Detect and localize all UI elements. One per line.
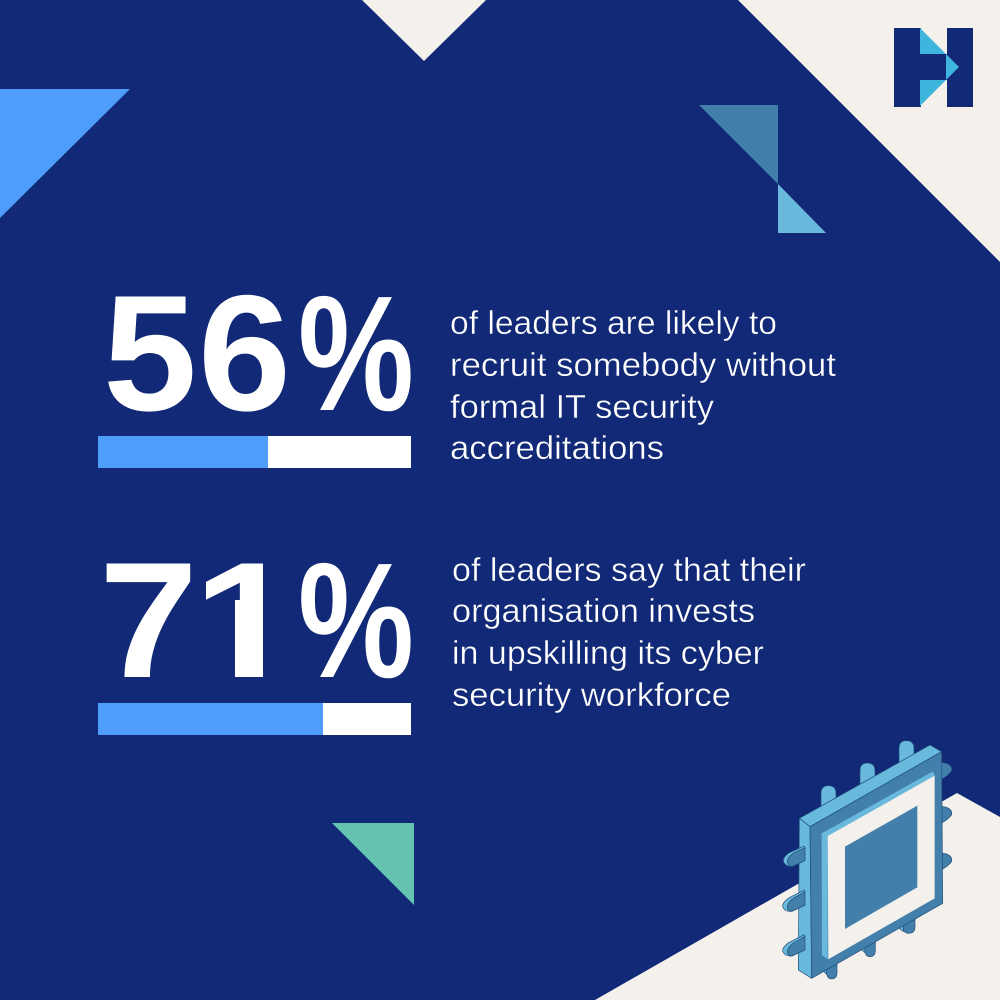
triangle: bright blue top left xyxy=(0,89,130,218)
text: 71 percent description xyxy=(452,551,806,713)
text: 56 percent description: of leaders are likely to xyxy=(450,304,777,341)
text: 56 percent description: formal IT security xyxy=(450,388,715,425)
chip pins behind body xyxy=(821,741,952,979)
stat: 71 percent: % xyxy=(298,529,414,712)
top notch background shape xyxy=(362,0,486,61)
chip inner square xyxy=(845,806,917,929)
top right background shape xyxy=(738,0,1000,262)
progress bar: 71 percent xyxy=(98,703,411,735)
stat: 56 percent: % xyxy=(298,262,414,445)
stat: 56 percent: 5 xyxy=(103,261,197,445)
stat: 56 percent xyxy=(103,261,414,445)
stat: 71 percent: 1 xyxy=(192,528,306,712)
stat: 56 percent: 6 xyxy=(198,261,291,445)
chip body xyxy=(798,745,943,978)
icon: microchip xyxy=(783,741,952,979)
text: 56 percent description: accreditations xyxy=(450,429,664,466)
text: 71 percent description: organisation invests xyxy=(452,592,755,629)
text: 56 percent description xyxy=(450,304,836,466)
text: 71 percent description: of leaders say that their xyxy=(452,551,806,588)
text: 71 percent description: security workforce xyxy=(452,676,731,713)
logo xyxy=(894,28,973,107)
triangle: light blue top xyxy=(778,184,826,233)
chip left pins xyxy=(783,846,805,956)
stat: 71 percent xyxy=(106,562,411,678)
bottom right background shape xyxy=(595,793,1000,1000)
triangle: steel blue top xyxy=(699,105,778,184)
triangle: teal bottom xyxy=(332,823,414,905)
text: 56 percent description: recruit somebody without xyxy=(450,346,836,383)
chip white plate xyxy=(828,776,935,959)
stat: 71 percent: 7 xyxy=(99,528,198,712)
text: 71 percent description: in upskilling its cyber xyxy=(452,634,764,671)
progress bar: 56 percent xyxy=(98,436,411,468)
